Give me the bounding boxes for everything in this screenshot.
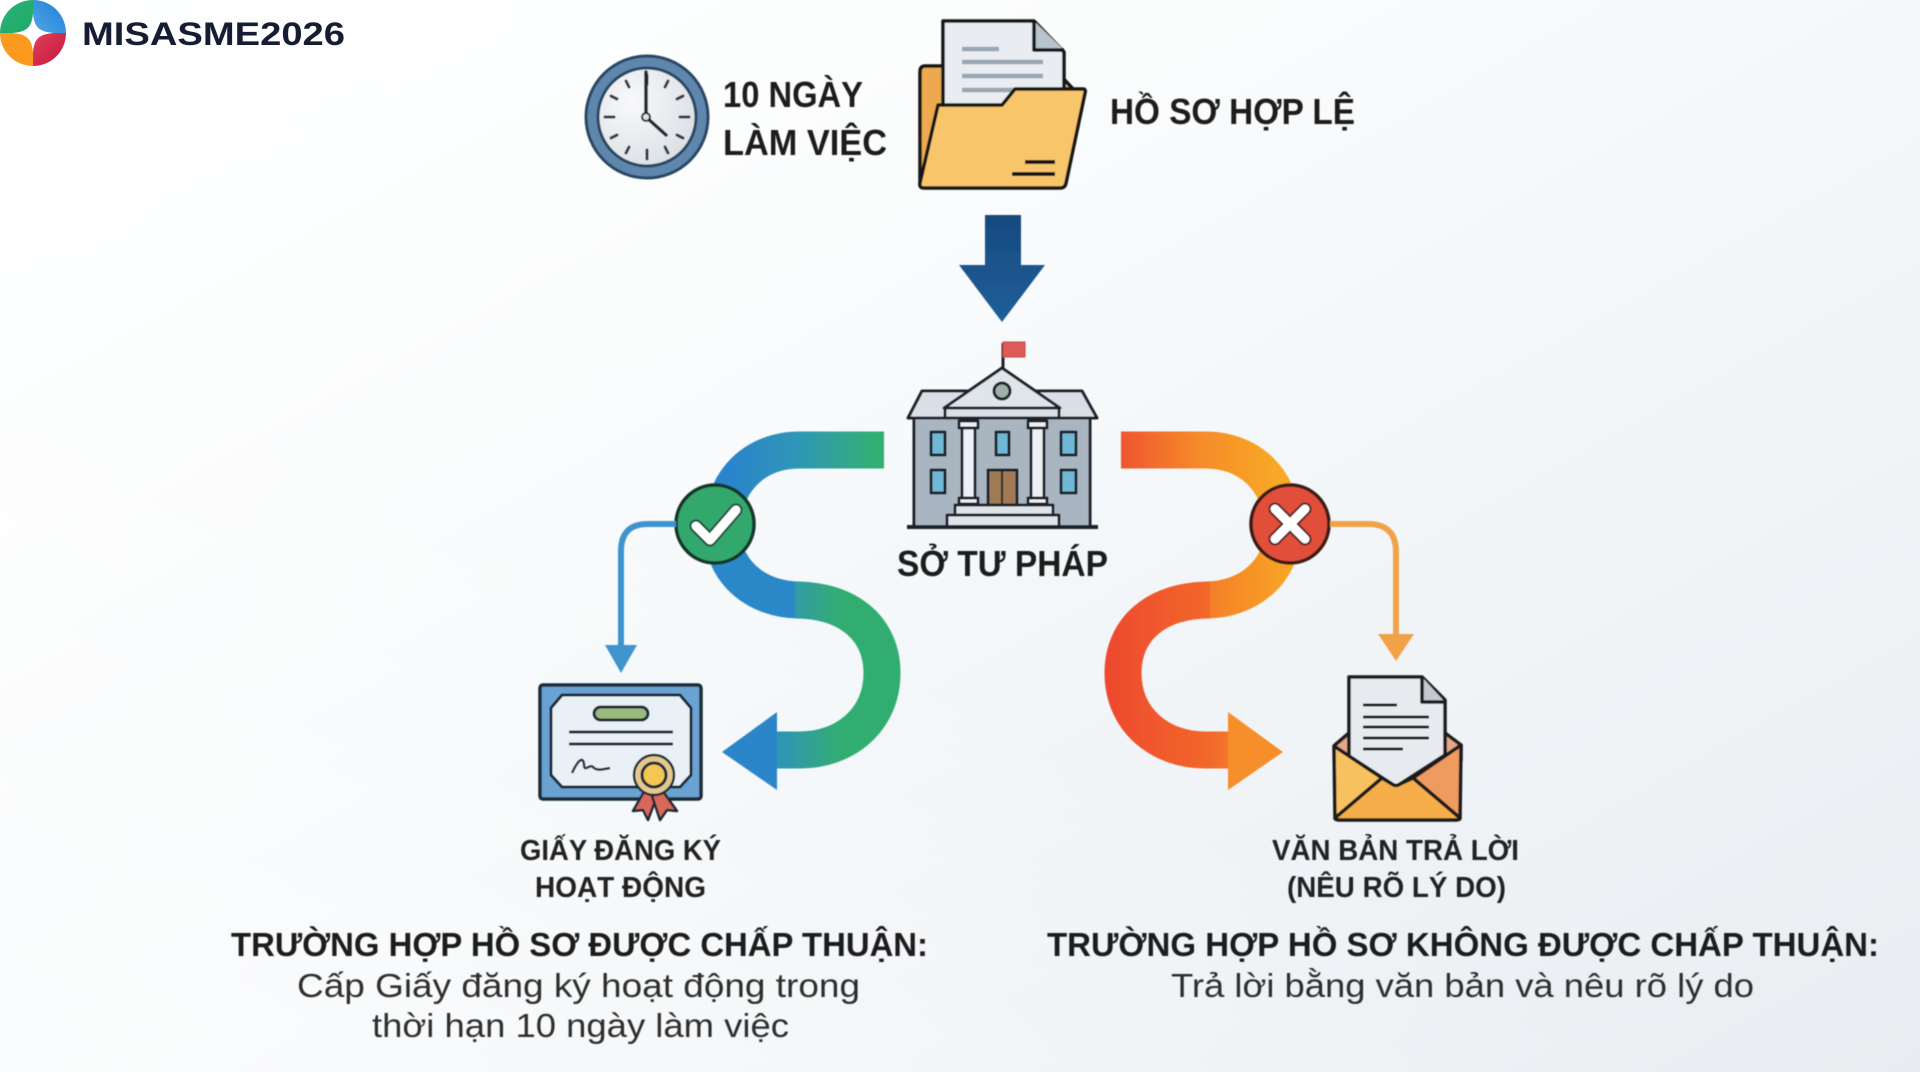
arrow: down: [959, 215, 1045, 322]
text: hồ sơ hợp lệ: HỒ SƠ HỢP LỆ: [1110, 90, 1355, 132]
arrow: rejected ribbon: [1121, 450, 1283, 790]
text block: rejected case: TRƯỜNG HỢP HỒ SƠ KHÔNG ĐƯỢC CHẤP THUẬN:: [1047, 925, 1879, 963]
icon: building: [907, 342, 1098, 527]
text: sở tư pháp: SỞ TƯ PHÁP: [897, 542, 1108, 584]
text: reply letter label: (NÊU RÕ LÝ DO): [1287, 870, 1506, 904]
icon: certificate: [540, 685, 701, 820]
text: 10 ngày làm việc: [723, 74, 887, 163]
text block: approved case: TRƯỜNG HỢP HỒ SƠ ĐƯỢC CHẤP THUẬN:: [231, 926, 928, 963]
icon: cross badge: [1251, 485, 1329, 563]
text block: rejected case: Trả lời bằng văn bản và nêu rõ lý do: [1171, 967, 1754, 1004]
icon: clock: [586, 56, 708, 178]
text block: rejected case: [1047, 925, 1879, 1004]
text block: approved case: thời hạn 10 ngày làm việc: [372, 1007, 789, 1044]
text: certificate label: HOẠT ĐỘNG: [535, 870, 706, 904]
icon: check badge: [676, 485, 754, 563]
arrow: to reply letter: [1330, 524, 1414, 661]
arrow: approved ribbon: [722, 450, 884, 790]
logo: [0, 0, 345, 66]
text block: approved case: Cấp Giấy đăng ký hoạt động trong: [297, 967, 860, 1004]
text: 10 ngày làm việc: 10 NGÀY: [723, 74, 863, 115]
icon: folder with document: [920, 21, 1085, 188]
arrow: to certificate: [605, 524, 676, 673]
text: reply letter label: [1272, 833, 1519, 904]
text: reply letter label: VĂN BẢN TRẢ LỜI: [1272, 833, 1519, 867]
logo: MISASME2026: [82, 16, 345, 52]
icon: envelope with letter: [1334, 677, 1461, 820]
text: certificate label: GIẤY ĐĂNG KÝ: [520, 833, 721, 867]
text: 10 ngày làm việc: LÀM VIỆC: [723, 121, 887, 163]
text: certificate label: [520, 833, 721, 904]
text block: approved case: [231, 926, 928, 1044]
